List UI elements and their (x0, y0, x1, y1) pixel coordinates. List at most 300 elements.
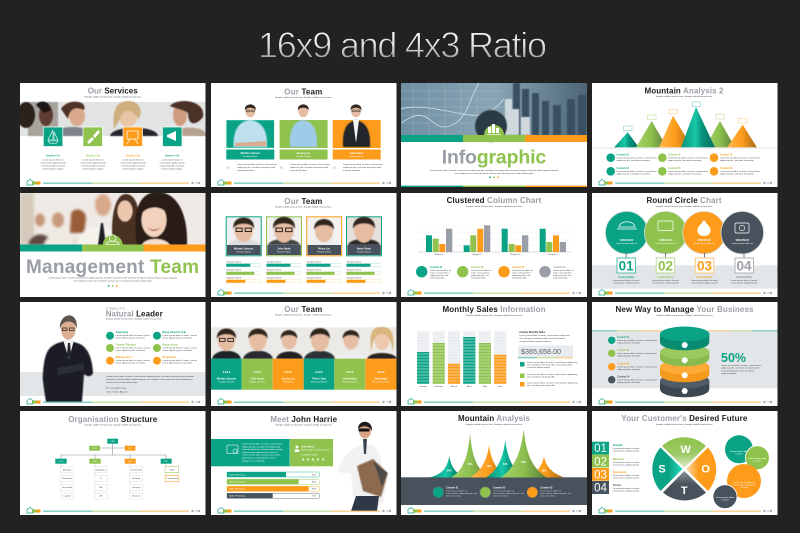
items: tetuer adipiscing elit, sed diam (116, 336, 145, 340)
content items: Content 02 (668, 154, 681, 156)
content items: Content 02 (493, 486, 506, 490)
green profile block: CONNECT NOW (301, 454, 319, 456)
stat: 50%: adipiscing elit, sed diam nonummy nibh (721, 367, 760, 370)
panel: organisation structure slide (20, 411, 206, 515)
checklist: elit, sed diam nonummy nibh (527, 384, 556, 387)
service text columns (40, 154, 185, 170)
left items: Lorem ipsum dolor sit amet, consectetuer (617, 352, 657, 355)
teal intro block (211, 439, 290, 466)
quote text: Lorem ipsum dolor sit amet, consectetuer adipiscing elit, sed diam nonummy nibh euismod (106, 375, 195, 378)
footer (599, 290, 772, 295)
chart: curved peaks: 40% (487, 465, 492, 468)
items: Lorem ipsum dolor sit amet, consec (116, 334, 151, 337)
panel: clustered column chart slide (401, 193, 587, 297)
quotes: Lorem ipsum dolor sit amet, consectetuer (343, 163, 383, 166)
content items (416, 266, 574, 280)
items: Making others (116, 356, 132, 359)
heading: Our Team (284, 305, 322, 314)
skill bars: Sample skill 03 (346, 278, 362, 280)
items: Respect Me (162, 356, 176, 359)
photo: city and charts (401, 83, 587, 142)
stat: 50% (721, 351, 761, 375)
panel: our team portraits slide (211, 193, 396, 297)
content items: Content 04 (616, 167, 630, 170)
card: Michale Johnson: Michale Johnson (241, 152, 261, 155)
content items: adipiscing elit, sed diam nonummy (720, 159, 754, 162)
left items: adipiscing elit, sed diam (617, 342, 640, 344)
org chart: QR (99, 496, 103, 498)
subtitle: Sample subtitle text put here. Sample subtitle text put here (84, 96, 142, 98)
numbered list: Lorem ipsum dolor sit amet, (613, 461, 640, 464)
subtitle: Sample subtitle text put here. Sample subtitle text put here (656, 314, 714, 317)
card: Michale Johnson: Graphic Director (218, 380, 235, 383)
swot pie: W (681, 444, 692, 456)
bar chart (418, 225, 572, 256)
quotes (227, 163, 383, 175)
chart: curved peaks: 80% (521, 461, 527, 464)
footer (408, 290, 581, 295)
heading: Your Customer's Desired Future (621, 414, 748, 423)
teal intro block: adipiscing elit, sed diam nonummy nibh (242, 445, 281, 448)
quotes: “ (333, 165, 336, 175)
skill bars: Sample skill 03 (306, 278, 322, 280)
checklist: elit, sed diam nonummy nibh euismod tincidunt (527, 364, 573, 366)
month labels: June (498, 386, 503, 388)
chart: curved peaks: 60% (468, 463, 473, 466)
org chart: Sales (169, 469, 176, 471)
footer (408, 398, 581, 404)
portrait 4: Nanie Putter (357, 248, 371, 250)
footer (27, 180, 200, 185)
service text columns: nonummy nibh euismod (121, 166, 145, 168)
content items: Lorem ipsum dolor sit amet, consectetuer (616, 156, 657, 160)
portrait 2 (266, 217, 302, 256)
bubble: green: Lorem ipsum dolor (748, 457, 767, 460)
service text columns: nonummy nibh euismod (81, 166, 105, 168)
circle: dark: Lorem ipsum dolor sit (732, 242, 753, 245)
bubble: orange (727, 464, 761, 498)
card: Deul Single (365, 359, 397, 390)
content items: Content 03 (540, 486, 553, 490)
service text columns: consectetur adipiscing elit (40, 162, 66, 164)
content items: Lorem ipsum dolor sit amet, consectetuer (720, 170, 760, 173)
portrait 3 (307, 217, 342, 256)
card: Clark Botley: Clark Botley (343, 377, 357, 380)
quotes: euismod tincidunt (343, 169, 360, 172)
grey band (20, 372, 206, 396)
icon: service tile 2 (83, 127, 102, 146)
skill bars: 90% (312, 489, 316, 491)
content items: adipiscing elit, sed (512, 274, 531, 277)
analysis text: elit, sed diam nonummy nibh euismod tincidunt (519, 337, 565, 340)
quotes: adipiscing elit, sed diam nonummy nibh (237, 166, 276, 169)
numbered list: Lorem ipsum dolor sit amet, (613, 487, 640, 490)
subtitle: Sample subtitle text put here. Sample subtitle text put here (656, 95, 713, 98)
skill bars: Sample skill 02 (346, 270, 362, 272)
card: Jessica Lee: Marketing (283, 380, 294, 383)
checklist: Lorem ipsum dolor sit amet, consectetuer adipiscing (527, 382, 578, 384)
card: John Harrie: John Harrie (350, 152, 364, 155)
bubble: orange: elit sed (741, 486, 748, 489)
org chart: Secretarie (62, 486, 73, 489)
skill bars: Sample skill 01 (346, 262, 362, 264)
content items: Content 06 (720, 167, 733, 170)
bar chart: Region 4 (549, 254, 558, 256)
colour band (20, 244, 206, 252)
number box 04: Lorem ipsum dolor sit amet, (730, 279, 758, 282)
card: Clark Botley: ●●●● (346, 370, 354, 374)
checklist: ut laoreet dolore magna (527, 366, 551, 369)
subtitle: Sample subtitle text put here. Sample subtitle text put here (656, 205, 713, 208)
heading: Infographic: Infographic (442, 146, 546, 168)
total value: $365,658.00 (521, 347, 561, 356)
content items: Lorem ipsum dolor sit (430, 269, 451, 272)
bubble: green (745, 446, 769, 470)
number box 01: 01 (619, 258, 634, 274)
card: Clark Botley (334, 359, 365, 390)
heading: New Way to Manage Your Business (616, 305, 754, 314)
numbered list: 02 (594, 456, 607, 468)
content items: amet, consectetuer (430, 272, 449, 274)
number box 01: consectetuer adipiscing elit (613, 281, 640, 284)
numbered list: Lorem ipsum dolor sit amet, (613, 447, 640, 450)
number box 03: Lorem ipsum dolor sit amet, (691, 279, 718, 282)
skill bars: Sample skill 01 (226, 262, 242, 264)
checklist (520, 361, 578, 387)
photo strip (211, 327, 397, 359)
org chart: COO (59, 461, 64, 463)
footer (599, 508, 772, 513)
panel: our team strip slide (211, 302, 396, 406)
quotes: “ (280, 165, 283, 175)
org chart: CEO (110, 441, 115, 443)
number box 02: Lorem ipsum dolor sit amet, (652, 279, 679, 282)
service text columns: consectetur adipiscing elit (120, 162, 146, 164)
quotes: “ (227, 165, 230, 175)
items: Forward Thinking (116, 343, 136, 346)
content items: Lorem ipsum dolor sit (540, 490, 561, 492)
month labels: January (419, 385, 428, 388)
footer (218, 508, 391, 513)
service text columns: Service # 01 (46, 154, 61, 158)
org chart: IT (100, 478, 102, 480)
skill bars (226, 262, 381, 283)
content items: adipiscing elit, sed diam nonummy (616, 172, 651, 176)
number box 04: 04 (736, 258, 752, 274)
content items: Content 03 (720, 154, 733, 156)
service text columns: laoreet dolore magna (83, 168, 104, 170)
cylinder chart (660, 326, 709, 397)
footer (599, 398, 772, 404)
quote text: Mr. JonathDon Doe (106, 387, 127, 390)
numbered list: consectetuer adipiscing elit (613, 450, 639, 452)
content items: Content 01 (446, 486, 459, 490)
skill bars: Sample skill 01 (306, 262, 322, 264)
org chart: CFO (93, 448, 97, 450)
heading: Clustered Column Chart (447, 196, 542, 205)
checklist: Lorem ipsum dolor sit amet, consectetuer adipiscing (527, 373, 578, 376)
icon: service tile 3 (123, 127, 142, 146)
numbered list: Lorem ipsum dolor sit amet, (613, 474, 640, 477)
panel: meet john harrie slide (211, 411, 396, 515)
description: erat volutpat ut wisi enim ad minim veniam, quis nostrud exerci tation ullamcorper (455, 172, 534, 175)
skill bars: Sample skill 02 (266, 270, 282, 272)
card: John Harrie: John Harrie (251, 377, 265, 380)
analysis text: Lorem ipsum dolor sit amet, consectetuer adipiscing (519, 334, 571, 337)
quote text: tincidunt ut laoreet dolore magna aliquam erat volutpat ut wisi enim ad minim veniam quis (106, 378, 193, 381)
segmented bar chart (423, 331, 500, 384)
footer (599, 180, 772, 185)
items: Being Honest (162, 343, 178, 346)
number box 03: Content Name (696, 276, 713, 279)
left items: Lorem ipsum dolor sit amet, consectetuer (617, 378, 657, 381)
dots (489, 176, 499, 178)
title: 16x9 and 4x3 Ratio (258, 24, 547, 66)
numbered list: Threats (613, 484, 622, 487)
heading: Meet John Harrie (270, 415, 338, 424)
photo: team portrait (20, 192, 206, 245)
bubble: dark: sit amet (721, 498, 729, 502)
numbered list: consectetuer adipiscing elit (613, 476, 639, 480)
numbered list: 03 (594, 470, 607, 482)
left items: Content 01 (617, 336, 630, 339)
card: Prince Jeny: Prince Jeny (312, 377, 326, 380)
panel: round circle chart slide (592, 193, 778, 297)
numbered list: consectetuer adipiscing elit (613, 464, 639, 466)
number box 03: 03 (697, 258, 712, 274)
card: John Harrie (333, 104, 381, 160)
circle: dark: $458,658.00 (736, 239, 750, 242)
content items: diam nonummy (493, 496, 509, 498)
content items: Lorem ipsum dolor sit amet, consectetuer (668, 170, 708, 173)
circle: teal: $458,658.00 (620, 239, 634, 242)
grey band (592, 330, 778, 388)
content items: nonummy nibh (430, 278, 445, 280)
skill bars: Sample skill 03 (266, 278, 282, 280)
content items: adipiscing elit, sed (553, 274, 572, 277)
left items (608, 336, 657, 384)
subtitle: Sample subtitle text put here. Sample subtitle text put here (106, 318, 163, 321)
content items: adipiscing elit, sed diam nonummy (616, 159, 651, 162)
number box 01: Lorem ipsum dolor sit amet, (613, 279, 640, 282)
content items: Lorem ipsum dolor sit (471, 269, 492, 272)
numbered list (592, 442, 640, 495)
month labels: February (434, 385, 444, 388)
icon: service tile 1 (43, 127, 63, 146)
number box 04 (730, 253, 758, 284)
card: Jessica Lee: ●●●● (284, 370, 292, 374)
quotes: Lorem ipsum dolor sit amet, consectetuer (290, 163, 330, 166)
org chart: CTO (128, 448, 133, 450)
card: Jessica Lee (280, 104, 328, 160)
quote text (106, 375, 195, 394)
numbered list: Opportunity (613, 471, 627, 474)
content items: Content 01 (430, 266, 443, 269)
number box 03: consectetuer adipiscing elit (691, 281, 718, 284)
teal intro block: Lorem ipsum dolor sit amet, consectetuer (242, 442, 282, 446)
panel: new way to manage slide (592, 302, 778, 406)
teal intro block: ullamcorper suscipit lobortis nisl ut (242, 456, 276, 460)
card: Michale Johnson: ●●●● (223, 370, 230, 374)
service text columns: Lorem ipsum dolor sit (123, 158, 144, 162)
quotes: euismod tincidunt (290, 169, 307, 172)
quotes: Lorem ipsum dolor sit amet, consectetuer (237, 163, 277, 166)
subtitle: Sample subtitle text put here. Sample subtitle text put here (466, 423, 523, 426)
heading: Organisation Structure (68, 415, 158, 424)
footer (27, 398, 200, 404)
numbered list: 04 (594, 483, 607, 495)
quotes: euismod tincidunt (237, 169, 254, 172)
heading: Natural Leader (106, 309, 163, 318)
green profile block (290, 439, 333, 466)
service text columns: nonummy nibh euismod (160, 166, 184, 168)
swot pie: S (658, 464, 666, 476)
quote text: nostrud exerci tation ullamcorper (106, 381, 138, 384)
card: Deul Single: ●●●● (377, 370, 385, 374)
total value (518, 345, 573, 358)
circle: orange (683, 211, 725, 254)
teal intro block: aliquip ex ea commodo (242, 460, 265, 462)
items: tetuer adipiscing elit, sed diam (162, 362, 192, 364)
service text columns: Service # 02 (86, 154, 101, 158)
service text columns: consectetur adipiscing elit (159, 162, 185, 164)
bubble: green: sit amet (753, 460, 762, 462)
stat: 50%: euismod tincidunt ut laoreet dolore (721, 369, 755, 372)
card: Prince Jeny (304, 359, 334, 390)
skill bars: 65% (312, 474, 316, 476)
content items: consectetuer adipiscing elit, sed (540, 492, 572, 495)
photo: man with jacket (338, 422, 388, 511)
bubble: orange: Lorem ipsum dolor sit (734, 481, 755, 484)
chart: curved peaks: 30% (447, 470, 453, 472)
card: John Harrie: Position Name (349, 155, 364, 158)
circle: teal (605, 211, 648, 254)
bubble: teal: sit amet (735, 452, 743, 456)
content items: Lorem ipsum dolor sit amet, consectetuer (616, 170, 657, 173)
panel: swot desired future slide (592, 411, 778, 515)
org chart: Logistic (63, 495, 72, 498)
heading: 6 Signs of a (106, 306, 125, 310)
content items: consectetuer adipiscing elit, sed (446, 492, 478, 495)
circle: dark (721, 211, 764, 254)
teal intro block: aliquam erat volutpat ut wisi enim ad (242, 451, 278, 454)
content items: Lorem ipsum dolor sit amet, consectetuer (720, 156, 760, 160)
heading: Mountain Analysis 2 (644, 86, 724, 96)
content items: adipiscing elit, sed diam nonummy (668, 159, 702, 162)
checklist: Lorem ipsum dolor sit amet, consectetuer adipiscing (527, 361, 578, 364)
grey band (592, 265, 778, 289)
org chart: Transaction (131, 468, 143, 471)
org chart: Services (132, 495, 141, 498)
skill bars: Skills Photoshop (229, 488, 246, 491)
month labels (419, 385, 503, 388)
portrait 3: Position Name (317, 251, 332, 254)
card: John Harrie: ●●●● (253, 370, 261, 374)
number box 02: 02 (658, 258, 673, 274)
subtitle: Sample subtitle text put here. Sample subtitle text put here (275, 96, 332, 99)
service text columns: laoreet dolore magna (123, 168, 144, 170)
panel: mountain analysis 2 slide (592, 83, 778, 187)
panel: monthly sales information slide (401, 302, 587, 406)
left items: Lorem ipsum dolor sit amet, consectetuer (617, 339, 657, 342)
items: Lorem ipsum dolor sit amet, consec (116, 359, 151, 362)
content items: adipiscing elit, sed diam nonummy (720, 172, 754, 176)
footer (408, 508, 581, 513)
swot pie: T (681, 485, 688, 497)
card: Deul Single: Deul Single (374, 377, 388, 380)
items: Awakening (116, 331, 129, 334)
description (48, 276, 177, 282)
photo: man in suit (43, 315, 93, 402)
bubble: orange: consectetuer adipiscing (733, 484, 756, 486)
description: Lorem ipsum dolor sit amet, consectetuer adipiscing elit, sed diam nonummy nibh euismod tincidunt ut laoreet dolore magna aliquam (430, 169, 558, 172)
card: Jessica Lee: Jessica Lee (281, 377, 296, 380)
heading: Management Team: Management Team (26, 257, 199, 278)
heading: Mountain Analysis (458, 414, 531, 423)
circle: teal: Lorem ipsum dolor sit (616, 242, 638, 245)
content items: Content 02 (471, 266, 484, 269)
bottom band (401, 186, 587, 187)
content items (606, 153, 760, 176)
stat: 50%: magna aliquam (721, 373, 736, 375)
service text columns: laoreet dolore magna (43, 168, 64, 170)
icon: service tile 4 (162, 127, 182, 146)
subtitle: Sample subtitle text put here. Sample subtitle text put here (466, 205, 523, 208)
dark band (401, 477, 587, 505)
service text columns: Lorem ipsum dolor sit (162, 158, 183, 162)
subtitle: Sample subtitle text put here. Sample subtitle text put here (275, 424, 333, 426)
footer (218, 180, 391, 185)
bar chart: Region 3 (511, 254, 520, 256)
icon: people badge (103, 235, 123, 245)
content items: adipiscing elit, sed (471, 274, 490, 277)
bar chart: Region 1 (435, 254, 444, 256)
stat: 50%: Lorem ipsum dolor sit amet, consectetuer (721, 364, 761, 367)
skill bars: 80% (312, 482, 316, 484)
card: Jessica Lee: Position Name (296, 155, 311, 158)
org chart (55, 439, 179, 499)
description (430, 169, 558, 175)
content items: Lorem ipsum dolor sit (553, 269, 574, 272)
footer (218, 398, 391, 404)
card: Prince Jeny: Marketing Expert (311, 380, 328, 383)
content items: consectetuer adipiscing elit, sed (493, 492, 525, 495)
org chart: Head-ngo (62, 478, 73, 480)
content items: Lorem ipsum dolor sit (493, 490, 514, 492)
skill bars (227, 472, 319, 498)
teal intro block: euismod tincidunt ut laoreet dolore magna (242, 448, 284, 451)
month labels: May (483, 386, 488, 388)
card: Michale Johnson (211, 359, 242, 390)
quotes: adipiscing elit, sed diam nonummy nibh (290, 166, 329, 169)
content items: diam nonummy (540, 496, 556, 498)
org chart: CSO (164, 461, 169, 463)
bubble: teal: Lorem ipsum dolor (730, 450, 748, 453)
skill bars: Sample skill 02 (306, 270, 322, 272)
content items: Content 05 (668, 167, 681, 170)
content items: adipiscing elit, sed diam nonummy (668, 172, 702, 176)
left items: Content 04 (617, 375, 630, 378)
items: tetuer adipiscing elit, sed diam (162, 336, 192, 340)
subtitle: Sample subtitle text put here. Sample subtitle text put here (275, 314, 332, 317)
skill bars: Skills Photoshop (229, 473, 246, 476)
chart: curved peaks: 50% (503, 463, 509, 466)
icon: bar chart badge (484, 124, 504, 135)
items: tetuer adipiscing elit, sed diam (162, 349, 192, 352)
analysis text: ut laoreet dolore magna aliquam (519, 340, 551, 343)
service text columns: Service # 03 (126, 154, 141, 158)
number box 01 (613, 253, 640, 284)
